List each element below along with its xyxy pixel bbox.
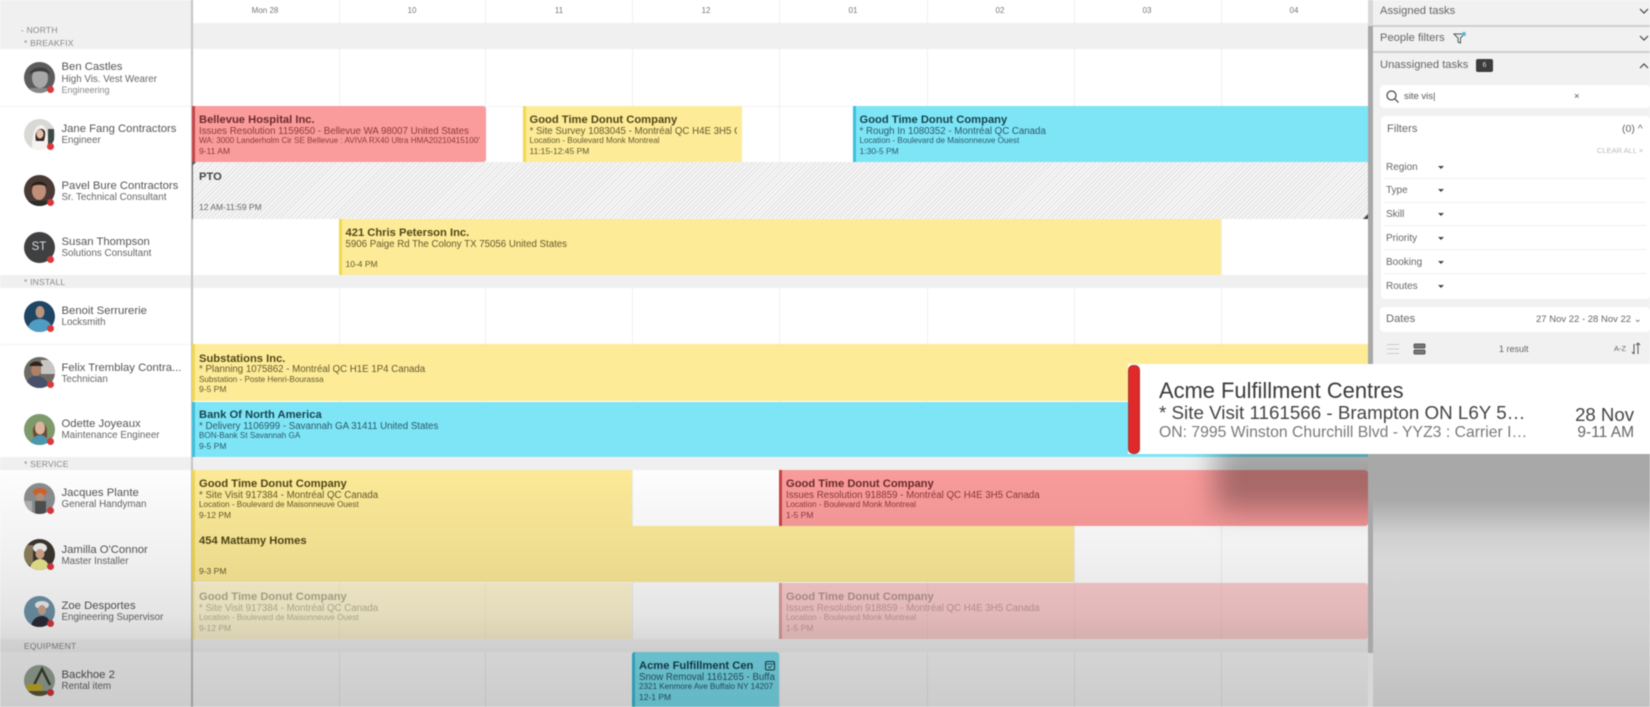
task: Bellevue Hospital Inc.: Bellevue Hospital Inc. xyxy=(199,114,315,126)
task: Bellevue Hospital Inc.: 9-11 AM xyxy=(199,146,230,156)
date label: 11: 11 xyxy=(555,6,563,14)
role: High Vis. Vest Wearer xyxy=(62,74,157,84)
date label: 04: 04 xyxy=(1290,6,1298,14)
filters title: Filters xyxy=(1387,123,1417,135)
task: faded Good Time Donut Company, issues resolution xyxy=(779,583,1368,639)
person: Susan Thompson xyxy=(23,231,152,264)
task: faded Good Time Donut Company, site visit: 9-12 PM xyxy=(199,623,231,633)
task: Bellevue Hospital Inc.: Issues Resolution 1159650 - Bellevue WA 98007 United States xyxy=(199,126,469,137)
task: faded Good Time Donut Company, issues resolution: Location - Boulevard Monk Montreal xyxy=(786,613,916,622)
panel divider xyxy=(191,0,193,707)
PTO start marker xyxy=(192,162,196,166)
avatar: Odette xyxy=(23,413,56,446)
panel: sidebar xyxy=(1373,0,1650,364)
task: Substations Inc.: Substation - Poste Henri-Bourassa xyxy=(199,374,324,384)
icon: filter xyxy=(1452,31,1467,44)
section band: service xyxy=(0,457,1368,470)
chevron xyxy=(1639,8,1649,14)
filter: skill: Skill xyxy=(1386,209,1404,220)
task: Bellevue Hospital Inc.: WA: 3000 Landerholm Cir SE Bellevue : AVIVA RX40 Ultra HMA20210415100' xyxy=(199,136,480,145)
role: Engineering Supervisor xyxy=(62,612,163,623)
popup drop shadow xyxy=(1215,440,1650,510)
person: Pavel Bure Contractors xyxy=(23,174,178,207)
task: Acme Fulfillment Centres, snow removal: Acme Fulfillment Cen xyxy=(639,660,753,672)
role: Solutions Consultant xyxy=(62,248,151,259)
task: Good Time Donut Company, issues resolution: Good Time Donut Company xyxy=(786,478,934,490)
resource: Backhoe 2 xyxy=(24,664,115,697)
task: Good Time Donut Company, rough in: Good Time Donut Company xyxy=(860,114,1007,126)
task: Substations Inc.: Substations Inc. xyxy=(199,353,285,365)
dimming gradient over lower rows xyxy=(0,460,1373,707)
role: Engineer xyxy=(62,135,101,146)
name: Susan Thompson xyxy=(62,236,150,248)
date label: Mon 28: Mon 28 xyxy=(252,6,278,14)
task: PTO: 12 AM-11:59 PM xyxy=(199,202,262,212)
task: Good Time Donut Company, site visit: Location - Boulevard de Maisonneuve Ouest xyxy=(199,500,359,509)
count badge: 6 xyxy=(1483,62,1486,69)
avatar: Zoe xyxy=(23,595,56,628)
person: Benoit Serrurerie xyxy=(23,300,147,333)
avatar: Benoit xyxy=(23,300,56,333)
task: Bank Of North America: 9-5 PM xyxy=(199,441,226,451)
avatar: Felix xyxy=(23,356,56,389)
task: faded Good Time Donut Company, issues resolution: 1-5 PM xyxy=(786,623,813,633)
task: Substations Inc. xyxy=(192,344,1368,401)
timeline date header xyxy=(252,6,1299,14)
section band: north / breakfix xyxy=(0,23,1368,49)
filter: region: Region xyxy=(1386,162,1418,173)
avatar: Jane xyxy=(24,118,56,150)
task: Good Time Donut Company, issues resolution xyxy=(779,470,1368,526)
task: Bank Of North America: * Delivery 1106999 - Savannah GA 31411 United States xyxy=(199,421,438,432)
header: assigned tasks xyxy=(1373,0,1650,27)
avatar: Jamilla xyxy=(23,538,56,571)
scrollbar thumb xyxy=(1368,26,1373,653)
person: Zoe Desportes xyxy=(23,595,164,628)
PTO end marker xyxy=(1363,214,1368,219)
filter: routes: Routes xyxy=(1386,280,1418,292)
task: 421 Chris Peterson Inc.: 421 Chris Peterson Inc. xyxy=(346,226,469,238)
name: Jacques Plante xyxy=(62,487,139,499)
search box xyxy=(1380,85,1650,108)
heading: equipment: EQUIPMENT xyxy=(24,640,76,650)
header: unassigned tasks xyxy=(1380,58,1649,73)
task: faded Good Time Donut Company, issues resolution: Issues Resolution 918859 - Montréal QC H4E 3H5 Canada xyxy=(786,603,1040,614)
task: PTO: PTO xyxy=(199,171,222,183)
task: Bellevue Hospital Inc. xyxy=(192,106,486,162)
scrollbar track xyxy=(1368,0,1373,707)
label: Unassigned tasks xyxy=(1380,59,1468,71)
label: People filters xyxy=(1380,32,1445,44)
date label: 12: 12 xyxy=(702,6,710,14)
heading: install: * INSTALL xyxy=(24,276,65,286)
status dot xyxy=(47,688,54,696)
panel: dates xyxy=(1380,307,1650,332)
name: Jane Fang Contractors xyxy=(62,123,176,135)
header: people filters xyxy=(1373,27,1650,53)
status dot xyxy=(47,380,54,388)
label: Dates xyxy=(1386,313,1415,325)
role: Technician xyxy=(62,374,108,384)
filter: priority: Priority xyxy=(1386,232,1417,244)
result count: 1 result xyxy=(1499,344,1529,354)
search text: site vis| xyxy=(1404,90,1436,102)
task: Good Time Donut Company, rough in xyxy=(853,106,1368,162)
section band: install xyxy=(0,275,1368,288)
name: Felix Tremblay Contra... xyxy=(62,362,181,374)
task: faded Good Time Donut Company, site visit xyxy=(192,583,632,639)
role: Master Installer xyxy=(62,556,128,566)
task: Acme Fulfillment Centres, snow removal: 2321 Kenmore Ave Buffalo NY 14207 xyxy=(639,682,773,691)
task: faded Good Time Donut Company, site visit: Location - Boulevard de Maisonneuve Ouest xyxy=(199,613,359,622)
name: Backhoe 2 xyxy=(62,669,115,681)
task: Substations Inc.: * Planning 1075862 - Montréal QC H1E 1P4 Canada xyxy=(199,364,425,375)
name: Zoe Desportes xyxy=(62,600,136,612)
label: Assigned tasks xyxy=(1380,5,1455,17)
task: 454 Mattamy Homes: 9-3 PM xyxy=(199,566,226,576)
status dot xyxy=(47,256,54,263)
name: Pavel Bure Contractors xyxy=(62,180,178,192)
person: Jacques Plante xyxy=(23,482,146,515)
callout time: 9-11 AM xyxy=(1577,424,1634,441)
task: 421 Chris Peterson Inc.: 5906 Paige Rd The Colony TX 75056 United States xyxy=(346,239,567,250)
icon: card view xyxy=(1412,342,1426,356)
icon: sort xyxy=(1631,342,1641,355)
task: Good Time Donut Company, site survey: 11:15-12:45 PM xyxy=(530,146,589,156)
date label: 03: 03 xyxy=(1143,6,1151,14)
chevron xyxy=(1639,62,1649,69)
task: Good Time Donut Company, site visit: Good Time Donut Company xyxy=(199,478,347,490)
person: Ben Castles xyxy=(23,61,158,96)
icon: list view xyxy=(1387,344,1399,354)
icon: magnifier xyxy=(1386,90,1400,104)
task: faded Good Time Donut Company, issues resolution: Good Time Donut Company xyxy=(786,591,934,603)
person: Felix Tremblay xyxy=(23,356,181,389)
sort label: A-Z xyxy=(1614,344,1626,353)
role: Rental item xyxy=(62,681,111,692)
role: Sr. Technical Consultant xyxy=(62,192,166,202)
callout detail: * Site Visit 1161566 - Brampton ON L6Y 5… xyxy=(1159,402,1525,422)
task: faded Good Time Donut Company, site visit: Good Time Donut Company xyxy=(199,591,347,603)
heading: service: * SERVICE xyxy=(24,458,69,468)
person: Jane Fang Contractors xyxy=(24,118,177,151)
section band: equipment xyxy=(0,639,1368,652)
avatar: initials ST: ST xyxy=(32,240,46,252)
status dot xyxy=(47,620,54,626)
task: Good Time Donut Company, site survey: Location - Boulevard Monk Montreal xyxy=(530,136,660,145)
role: General Handyman xyxy=(62,499,146,510)
person: Jamilla O'Connor xyxy=(23,538,148,571)
date range: 27 Nov 22 - 28 Nov 22 ⌄ xyxy=(1536,314,1642,324)
task: Bank Of North America xyxy=(192,402,1368,457)
task: Acme Fulfillment Centres, snow removal: 12-1 PM xyxy=(639,692,671,702)
callout date: 28 Nov xyxy=(1575,404,1634,424)
task: Good Time Donut Company, site visit: * Site Visit 917384 - Montréal QC Canada xyxy=(199,490,378,501)
count badge xyxy=(1476,59,1493,72)
task: Good Time Donut Company, site visit: 9-12 PM xyxy=(199,510,231,520)
task: Good Time Donut Company, rough in: Location - Boulevard de Maisonneuve Ouest xyxy=(860,136,1019,145)
clear button: × xyxy=(1574,91,1580,102)
status dot xyxy=(47,86,54,92)
task: 454 Mattamy Homes xyxy=(192,526,1074,582)
left resource panel background xyxy=(0,0,192,23)
status dot xyxy=(47,562,54,570)
filter: type: Type xyxy=(1386,185,1408,196)
heading: breakfix: * BREAKFIX xyxy=(24,38,74,48)
task: Substations Inc.: 9-5 PM xyxy=(199,384,226,394)
avatar: Ben xyxy=(23,61,56,94)
task: Good Time Donut Company, rough in: 1:30-5 PM xyxy=(860,146,899,156)
task: Bank Of North America: Bank Of North America xyxy=(199,409,322,421)
task: faded Good Time Donut Company, site visit: * Site Visit 917384 - Montréal QC Canada xyxy=(199,603,378,614)
callout: dragged task card xyxy=(1128,364,1650,454)
date label: 10: 10 xyxy=(408,6,416,14)
heading: north: - NORTH xyxy=(21,24,58,34)
task: 421 Chris Peterson Inc.: 10-4 PM xyxy=(346,259,378,269)
task: Good Time Donut Company, rough in: * Rough In 1080352 - Montréal QC Canada xyxy=(860,126,1046,137)
date label: 02: 02 xyxy=(996,6,1004,14)
task: Good Time Donut Company, issues resolution: Issues Resolution 918859 - Montréal QC H4E 3H5 Canada xyxy=(786,490,1040,501)
avatar: Jacques xyxy=(23,482,56,515)
task: 421 Chris Peterson Inc. xyxy=(339,219,1221,275)
task: Bank Of North America: BON-Bank St Savannah GA xyxy=(199,431,300,440)
results toolbar xyxy=(1387,342,1641,356)
chevron xyxy=(1639,35,1649,42)
status dot xyxy=(47,324,54,332)
task: Acme Fulfillment Centres, snow removal xyxy=(632,652,779,707)
name: Jamilla O'Connor xyxy=(62,544,148,556)
callout address: ON: 7995 Winston Churchill Blvd - YYZ3 : Carrier I… xyxy=(1159,424,1527,441)
task: Good Time Donut Company, site survey xyxy=(523,106,742,162)
avatar: initials ST xyxy=(24,232,54,262)
task: Good Time Donut Company, site visit xyxy=(192,470,632,526)
status dot xyxy=(47,142,54,150)
person: Odette Joyeaux xyxy=(23,413,160,446)
task: Good Time Donut Company, site survey: Good Time Donut Company xyxy=(530,114,677,126)
task: 454 Mattamy Homes: 454 Mattamy Homes xyxy=(199,535,307,547)
callout title: Acme Fulfillment Centres xyxy=(1159,378,1404,403)
lower right empty area xyxy=(1373,454,1650,707)
status dot xyxy=(47,199,54,206)
avatar: Pavel xyxy=(23,174,56,207)
status dot xyxy=(47,506,54,514)
avatar: backhoe xyxy=(24,664,56,697)
panel: filters xyxy=(1381,116,1650,299)
name: Benoit Serrurerie xyxy=(62,305,147,317)
clear all: CLEAR ALL × xyxy=(1597,146,1643,155)
role: Maintenance Engineer xyxy=(62,430,160,441)
filters count: (0) ^ xyxy=(1622,123,1643,135)
name: Odette Joyeaux xyxy=(62,418,141,430)
task: Good Time Donut Company, issues resolution: Location - Boulevard Monk Montreal xyxy=(786,500,916,509)
task: Good Time Donut Company, issues resolution: 1-5 PM xyxy=(786,510,813,520)
status dot xyxy=(47,438,54,445)
date label: 01: 01 xyxy=(849,6,857,14)
name: Ben Castles xyxy=(62,61,122,73)
role: Locksmith xyxy=(62,317,106,328)
team: Engineering xyxy=(62,85,110,95)
icon: calendar check xyxy=(764,660,776,672)
filter: booking: Booking xyxy=(1386,256,1422,268)
red accent bar xyxy=(1128,365,1140,454)
task: PTO xyxy=(192,162,1368,219)
